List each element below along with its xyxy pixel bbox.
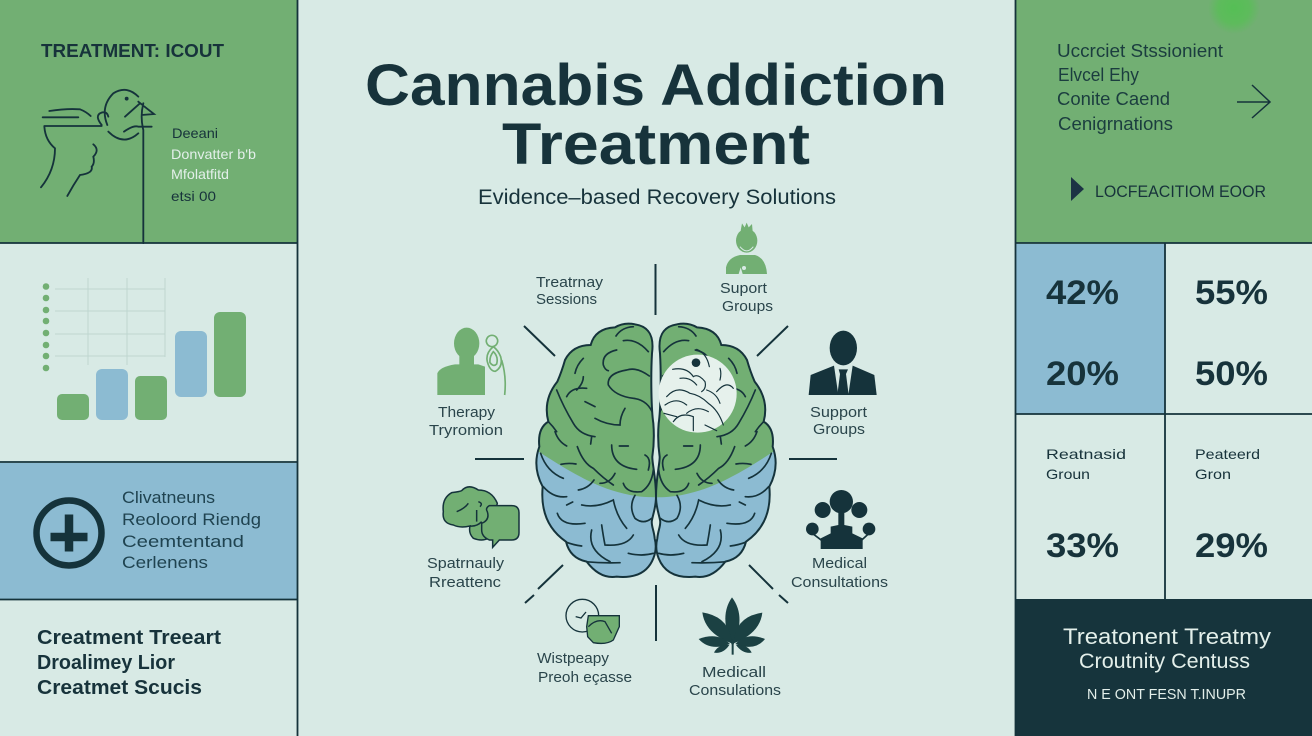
text: small list: Donvatter b'b [171,146,256,162]
panel: dark community center [1015,599,1312,736]
icon: brain with speech bubble [443,487,519,547]
panel: stat 42 and 20 [1016,244,1165,414]
label: wistpeapy: Wistpeapy [537,650,610,667]
title: Cannabis Addiction [365,53,947,118]
icon: plus in circle [36,500,102,566]
label: support groups right: Support [810,404,868,421]
label: wistpeapy [537,650,632,686]
label: support groups right [810,404,868,438]
text: blue callout lines: Ceemtentand [122,532,244,551]
label: therapy sessions [536,274,604,308]
panel: dark community center: Croutnity Centuss [1079,650,1250,673]
label: medical consultations bottom: Consulations [689,682,781,699]
text: blue callout lines: Clivatneuns [122,488,215,507]
icon: business person [809,331,877,395]
brain diagram [520,310,792,577]
label: support groups top [720,280,773,315]
label: medical consultations bottom [689,664,781,699]
panel: stat 29: Gron [1195,466,1231,482]
text: blue callout lines [122,488,261,572]
label: spatrnauly reattenc: Spatrnauly [427,555,505,572]
text: session lines: Conite Caend [1057,89,1170,109]
icon: check and green hand [566,599,619,643]
title [365,53,947,177]
text: small list [171,125,256,204]
chart grid [55,278,165,365]
label: therapy [429,404,503,439]
icon: triangle marker [1071,177,1084,201]
label: therapy sessions: Sessions [536,291,597,308]
icon: cannabis leaf [699,597,765,655]
label: medical consultations right: Medical [812,555,867,572]
brain highlight circle [659,349,737,433]
panel: stat 55 and 50 [1195,274,1268,393]
label: spatrnauly reattenc: Rreattenc [429,574,502,591]
icon: head line drawing [41,90,154,243]
spokes around brain [475,264,837,641]
label: therapy: Therapy [438,404,496,421]
title: Treatment [502,112,810,177]
panel: treatment count [0,0,297,243]
panel: bottom left text: Creatmet Scucis [37,677,202,699]
label: therapy sessions: Treatrnay [536,274,604,291]
panel: dark community center: Treatonent Treatmy [1063,624,1271,649]
text: small list: Mfolatfitd [171,166,229,182]
panel: stat 42 and 20: 42% [1046,274,1119,312]
panel: bottom left text: Creatment Treeart [37,627,221,649]
panel: bar chart [0,244,297,462]
panel: bottom left text: Droalimey Lior [37,652,175,674]
panel: stat 55 and 50: 50% [1195,355,1268,393]
text: session lines: Uccrciet Stssionient [1057,41,1223,61]
icon: support person [726,223,767,274]
label: spatrnauly reattenc [427,555,505,591]
chart bars [57,312,246,420]
label: wistpeapy: Preoh eçasse [538,669,632,686]
panel: blue plus callout [0,463,297,599]
panel: stat 33: Reatnasid [1046,446,1126,462]
subtitle: Evidence–based Recovery Solutions [478,186,836,209]
icon: therapy person [437,328,505,395]
text: location: LOCFEACITIOM EOOR [1095,182,1266,201]
panel: stat 33: 33% [1046,527,1119,565]
panel: dark community center: N E ONT FESN T.INUPR [1087,686,1246,703]
panel: stat 29 [1195,446,1268,565]
label: medical consultations bottom: Medicall [702,664,766,681]
panel: stat 29: 29% [1195,527,1268,565]
label: therapy: Tryromion [429,422,503,439]
label: support groups top: Groups [722,298,773,315]
panel: stat 29: Peateerd [1195,446,1260,462]
chart dots [43,283,49,371]
label: medical consultations right: Consultations [791,574,888,591]
text: session lines: Cenigrnations [1058,114,1173,134]
text: session lines: Elvcel Ehy [1058,65,1139,85]
icon: network medical [806,490,875,549]
label: medical consultations right [791,555,888,591]
panel: top right session info [1016,0,1312,243]
panel: stat 33 [1046,446,1126,565]
green glow [1208,0,1260,34]
panel: stat 55 and 50: 55% [1195,274,1268,312]
label: support groups top: Suport [720,280,768,297]
panel: bottom left text [0,600,297,736]
text: session lines [1057,41,1223,134]
heading: treatment count: TREATMENT: ICOUT [41,40,225,61]
text: small list: Deeani [172,125,218,141]
arrow [1237,85,1270,118]
panel: stat 33: Groun [1046,466,1090,482]
text: blue callout lines: Cerlenens [122,553,208,572]
text: small list: etsi 00 [171,188,216,204]
text: blue callout lines: Reoloord Riendg [122,510,261,529]
label: support groups right: Groups [813,421,865,438]
panel: stat 42 and 20: 20% [1046,355,1119,393]
